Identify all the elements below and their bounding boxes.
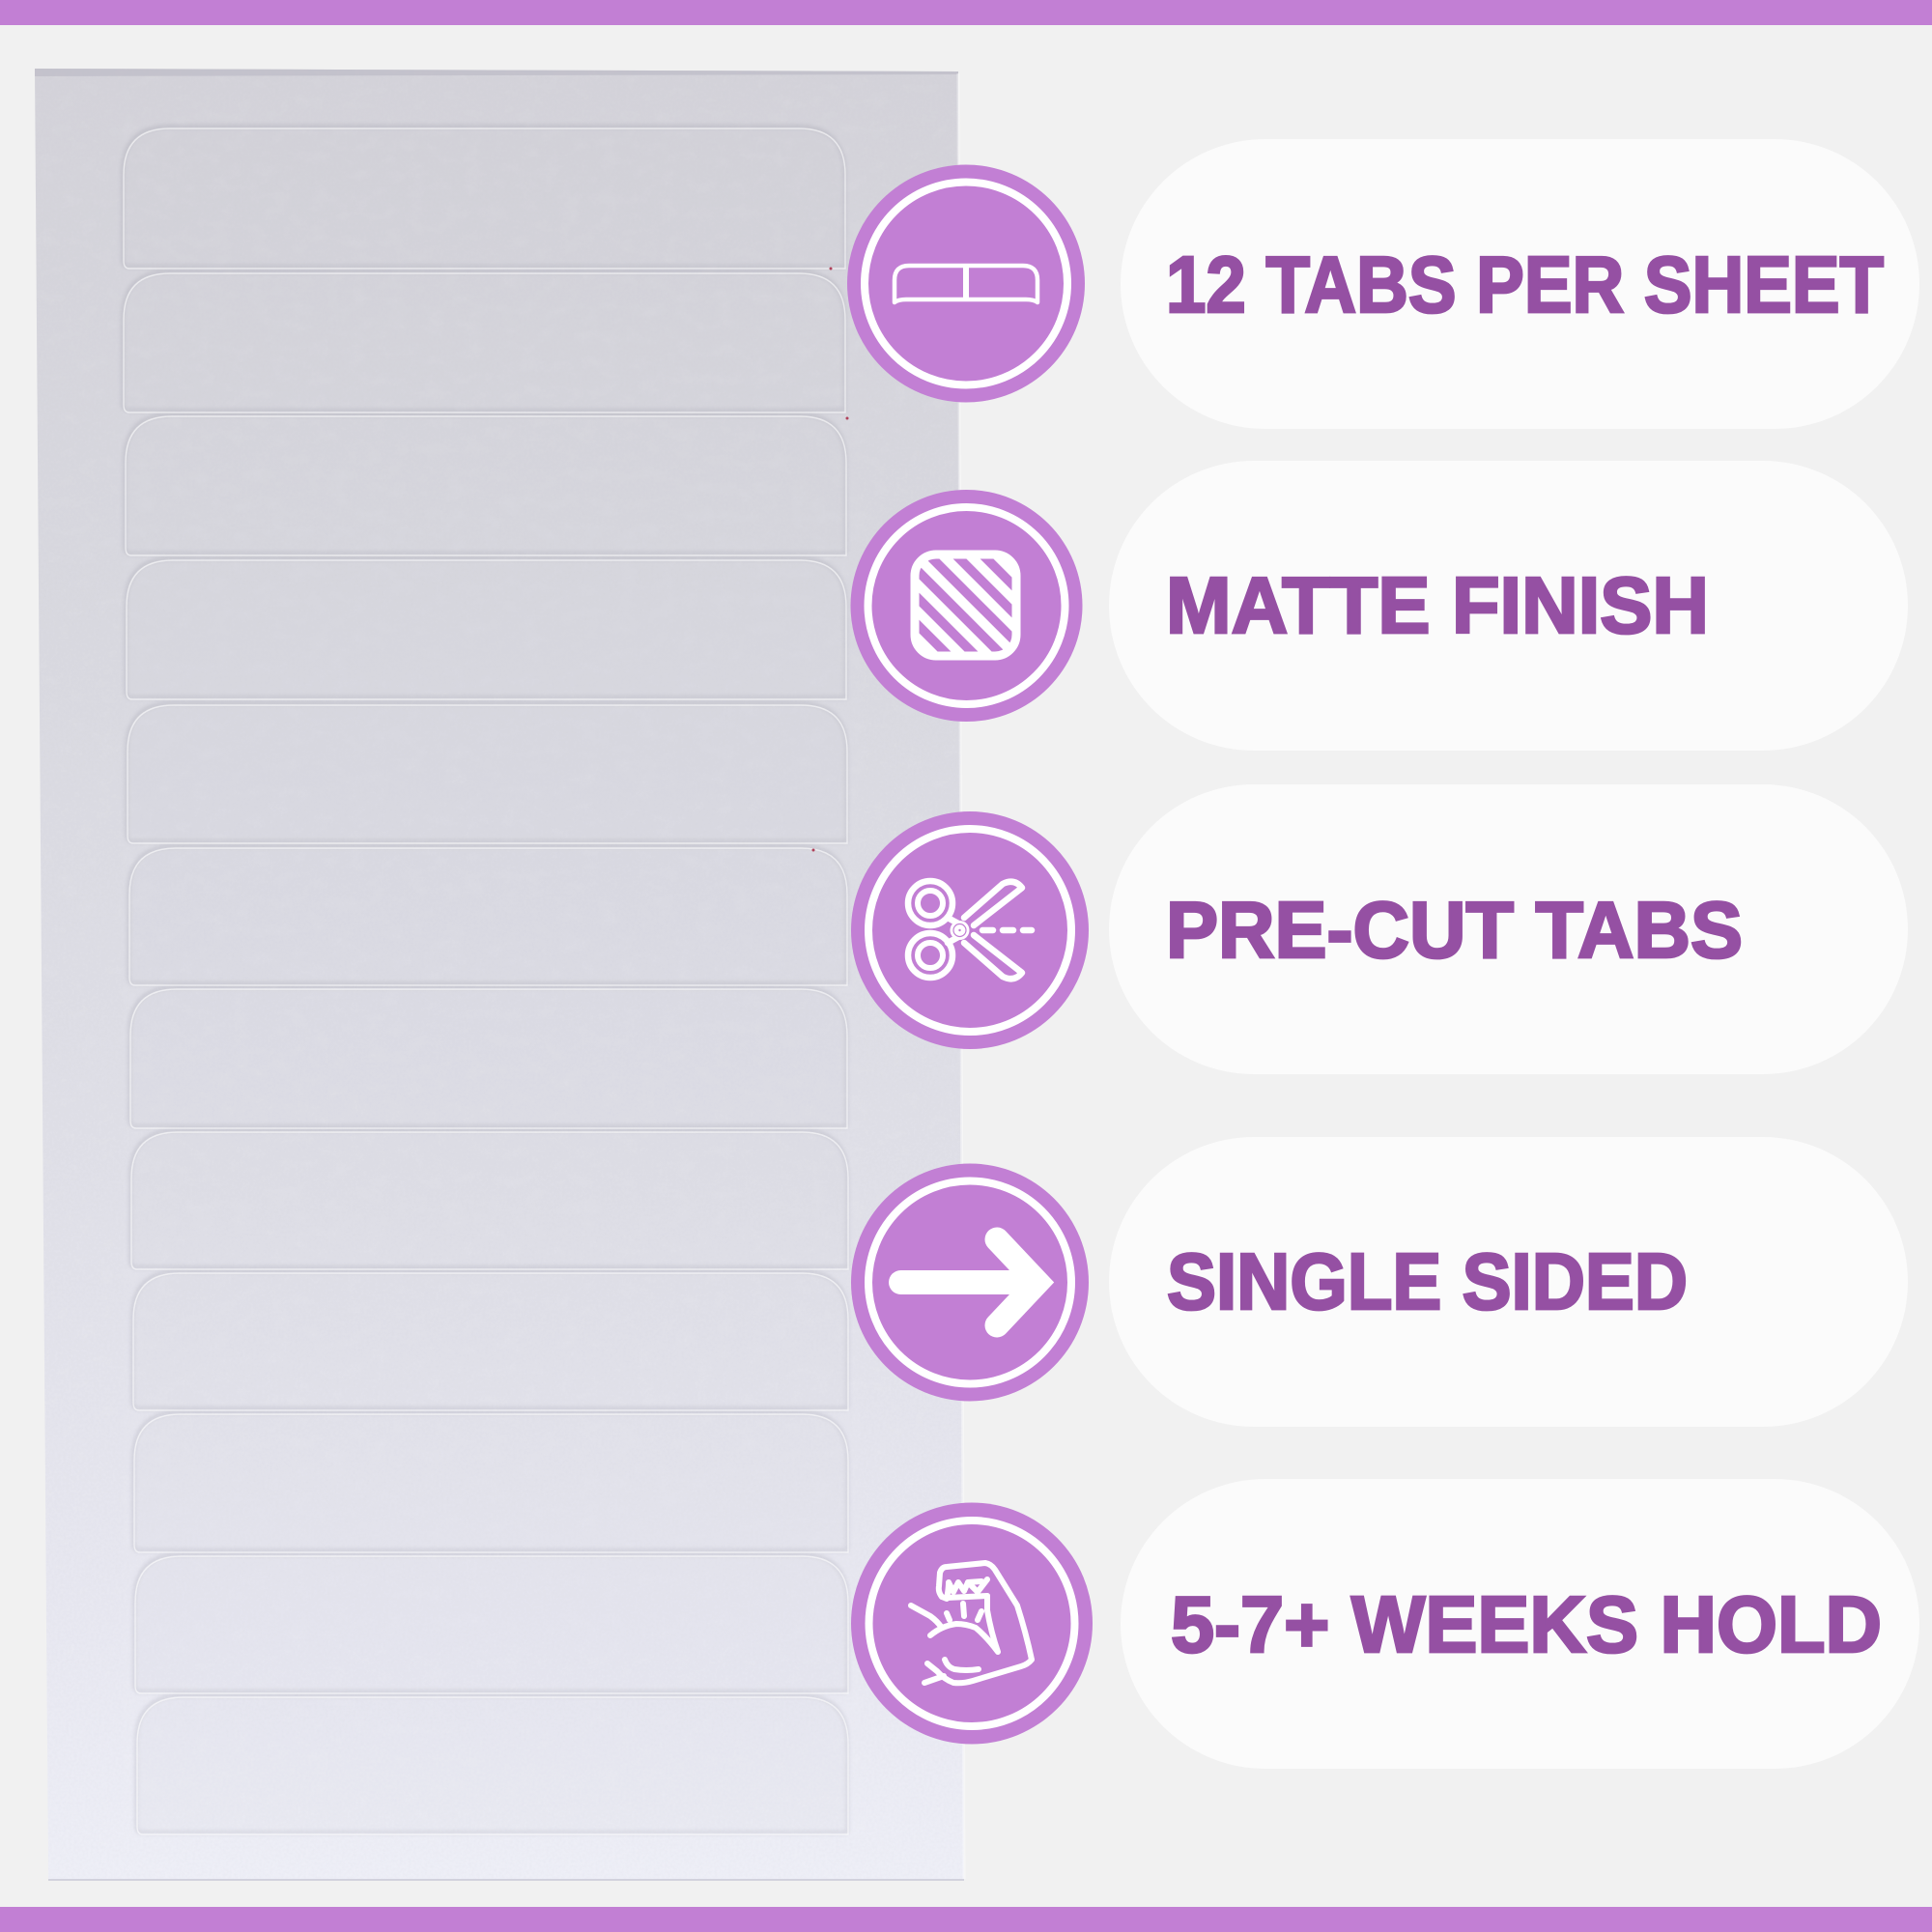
badge ring — [865, 182, 1067, 384]
pill — [1109, 461, 1908, 751]
feature row: single sided — [851, 1137, 1908, 1427]
pill — [1121, 139, 1919, 429]
label: 5-7+ WEEKS HOLD — [1171, 1579, 1882, 1669]
label: PRE-CUT TABS — [1166, 885, 1743, 975]
pill — [1121, 1479, 1919, 1769]
product photo: sheet of 12 tape tabs — [29, 63, 971, 1889]
label: SINGLE SIDED — [1167, 1236, 1688, 1326]
icon: scissors with dashed cut line — [908, 881, 1032, 979]
feature row: 12 tabs per sheet — [847, 139, 1919, 429]
top purple bar — [0, 0, 1932, 25]
badge ring — [869, 1520, 1074, 1726]
badge ring — [868, 829, 1071, 1032]
feature row: pre-cut tabs — [851, 784, 1908, 1074]
feature row: 5-7+ weeks hold — [851, 1479, 1919, 1769]
icon: flexed arm — [911, 1563, 1032, 1683]
icon: two tabs — [895, 266, 1037, 302]
twelve tape tabs — [124, 128, 848, 1834]
badge circle — [851, 811, 1089, 1049]
badge circle — [847, 164, 1085, 402]
pill — [1109, 784, 1908, 1074]
bottom purple bar — [0, 1907, 1932, 1932]
label: MATTE FINISH — [1166, 560, 1709, 650]
feature row: matte finish — [850, 461, 1908, 751]
badge ring — [868, 1180, 1071, 1383]
backing sheet — [35, 69, 964, 1881]
badge circle — [850, 490, 1082, 722]
badge ring — [867, 507, 1065, 704]
pill — [1109, 1137, 1908, 1427]
badge circle — [851, 1503, 1093, 1745]
icon: right arrow — [900, 1239, 1037, 1325]
icon: diagonal striped square — [910, 551, 1020, 661]
badge circle — [851, 1163, 1089, 1401]
